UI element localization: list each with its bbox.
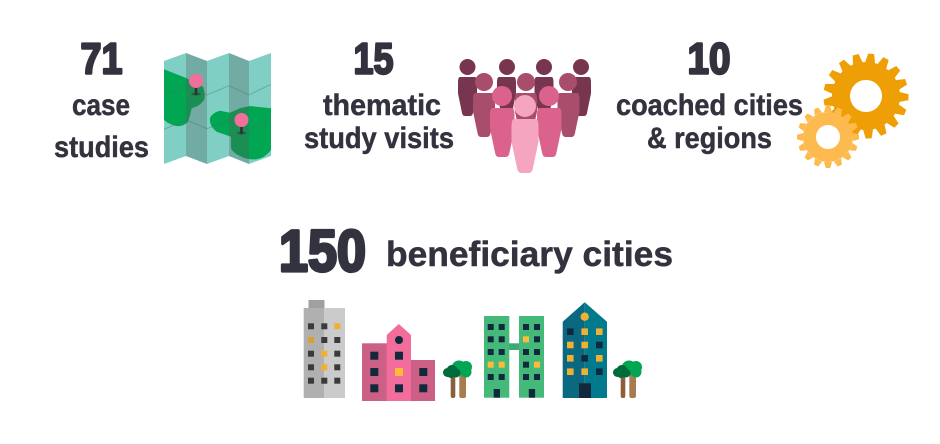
label: coached cities & regions: & regions — [647, 122, 772, 155]
label: case studies: case — [72, 89, 130, 122]
building: green twin towers — [484, 316, 544, 398]
label: thematic study visits: thematic — [323, 89, 441, 122]
icon: small gear — [797, 106, 859, 168]
stat: 150 beneficiary cities — [279, 219, 673, 284]
building: teal gabled house — [563, 302, 607, 398]
icon: folded map with pins — [164, 53, 271, 164]
number: 150: 150 — [279, 219, 366, 284]
label: thematic study visits: study visits — [304, 122, 454, 155]
label: beneficiary cities: beneficiary cities — [386, 235, 673, 274]
icon: group of people — [458, 59, 591, 173]
number: 15: 15 — [354, 34, 394, 84]
label: thematic study visits — [304, 89, 454, 155]
icon: map pin two — [234, 113, 248, 134]
label: coached cities & regions — [616, 89, 803, 155]
icon: map pin one — [189, 74, 203, 96]
illustration: city buildings — [304, 300, 642, 401]
label: case studies — [54, 89, 149, 164]
stat: 71 case studies — [54, 34, 149, 164]
icon: gears — [797, 49, 914, 168]
number: 10: 10 — [688, 34, 730, 84]
icon: trees beside teal house — [613, 360, 642, 398]
label: coached cities & regions: coached cities — [616, 89, 803, 122]
building: pink block — [362, 324, 435, 401]
building: grey tower — [304, 300, 345, 398]
number: 71: 71 — [80, 34, 122, 84]
label: case studies: studies — [54, 131, 149, 164]
icon: trees beside pink block — [443, 360, 472, 398]
stat: 10 coached cities & regions — [616, 34, 803, 155]
stat: 15 thematic study visits — [304, 34, 454, 155]
icon: large gear — [818, 49, 914, 144]
